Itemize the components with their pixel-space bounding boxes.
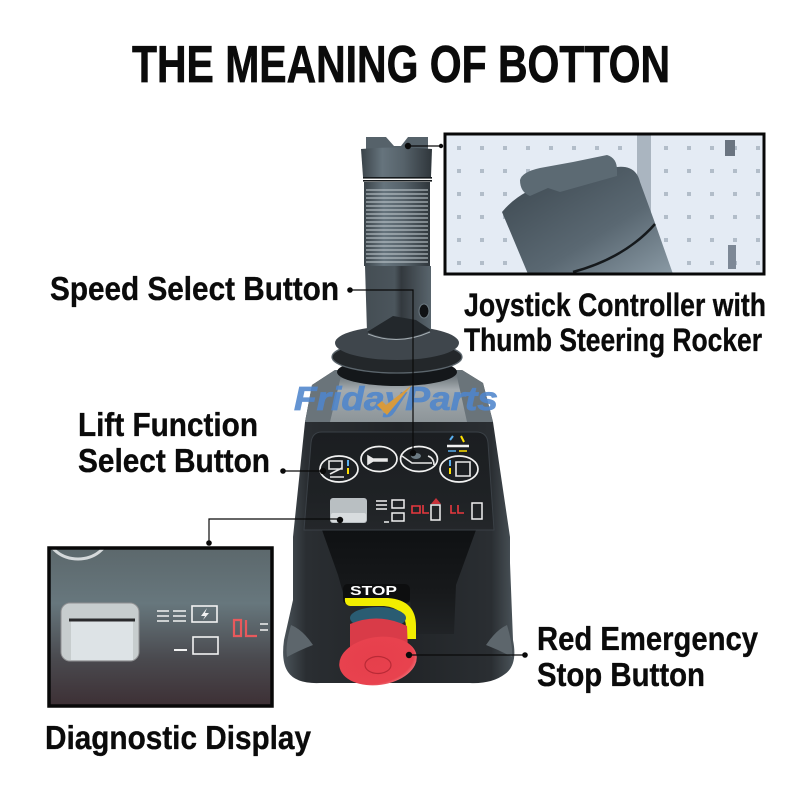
stop label: STOP: [350, 583, 397, 598]
label: red emergency stop button: Stop Button: [537, 656, 705, 693]
icon: horn button: [361, 446, 397, 472]
label: lift function select button: Select Button: [78, 442, 270, 479]
label: diagnostic display: Diagnostic Display: [45, 719, 312, 756]
side pods: [286, 625, 313, 657]
label: lift function select button: Lift Function: [78, 406, 258, 443]
stop label: [343, 583, 410, 603]
leader dots: [206, 143, 528, 658]
diagnostic icons: [376, 500, 482, 522]
icon: lift function button: [320, 456, 358, 482]
lower recess: [322, 530, 476, 634]
label: red emergency stop button: Red Emergency: [537, 620, 759, 657]
label: red emergency stop button: [537, 620, 759, 693]
diagnostic button: [330, 498, 367, 523]
joystick boot discs: [332, 326, 462, 386]
icon: drive function button: [440, 456, 478, 482]
icon: speed select button: [400, 446, 438, 472]
joystick shaft: [361, 137, 432, 340]
label: joystick controller: [464, 287, 766, 358]
inset: diagnostic display photo: [47, 546, 274, 708]
button panel: [304, 432, 494, 530]
logo watermark: FridayParts: [294, 380, 498, 417]
controller illustration: [283, 137, 514, 690]
yellow stop arc: [345, 598, 416, 639]
label: speed select button: Speed Select Button: [50, 270, 339, 307]
inset: joystick top photo: [445, 134, 764, 274]
leader lines: [209, 146, 525, 655]
title: THE MEANING OF BOTTON: [132, 36, 670, 94]
diagnostic codes: [412, 505, 464, 513]
red emergency stop button: [336, 607, 420, 690]
label: lift function select button: [78, 406, 270, 479]
control base body: [283, 370, 514, 683]
